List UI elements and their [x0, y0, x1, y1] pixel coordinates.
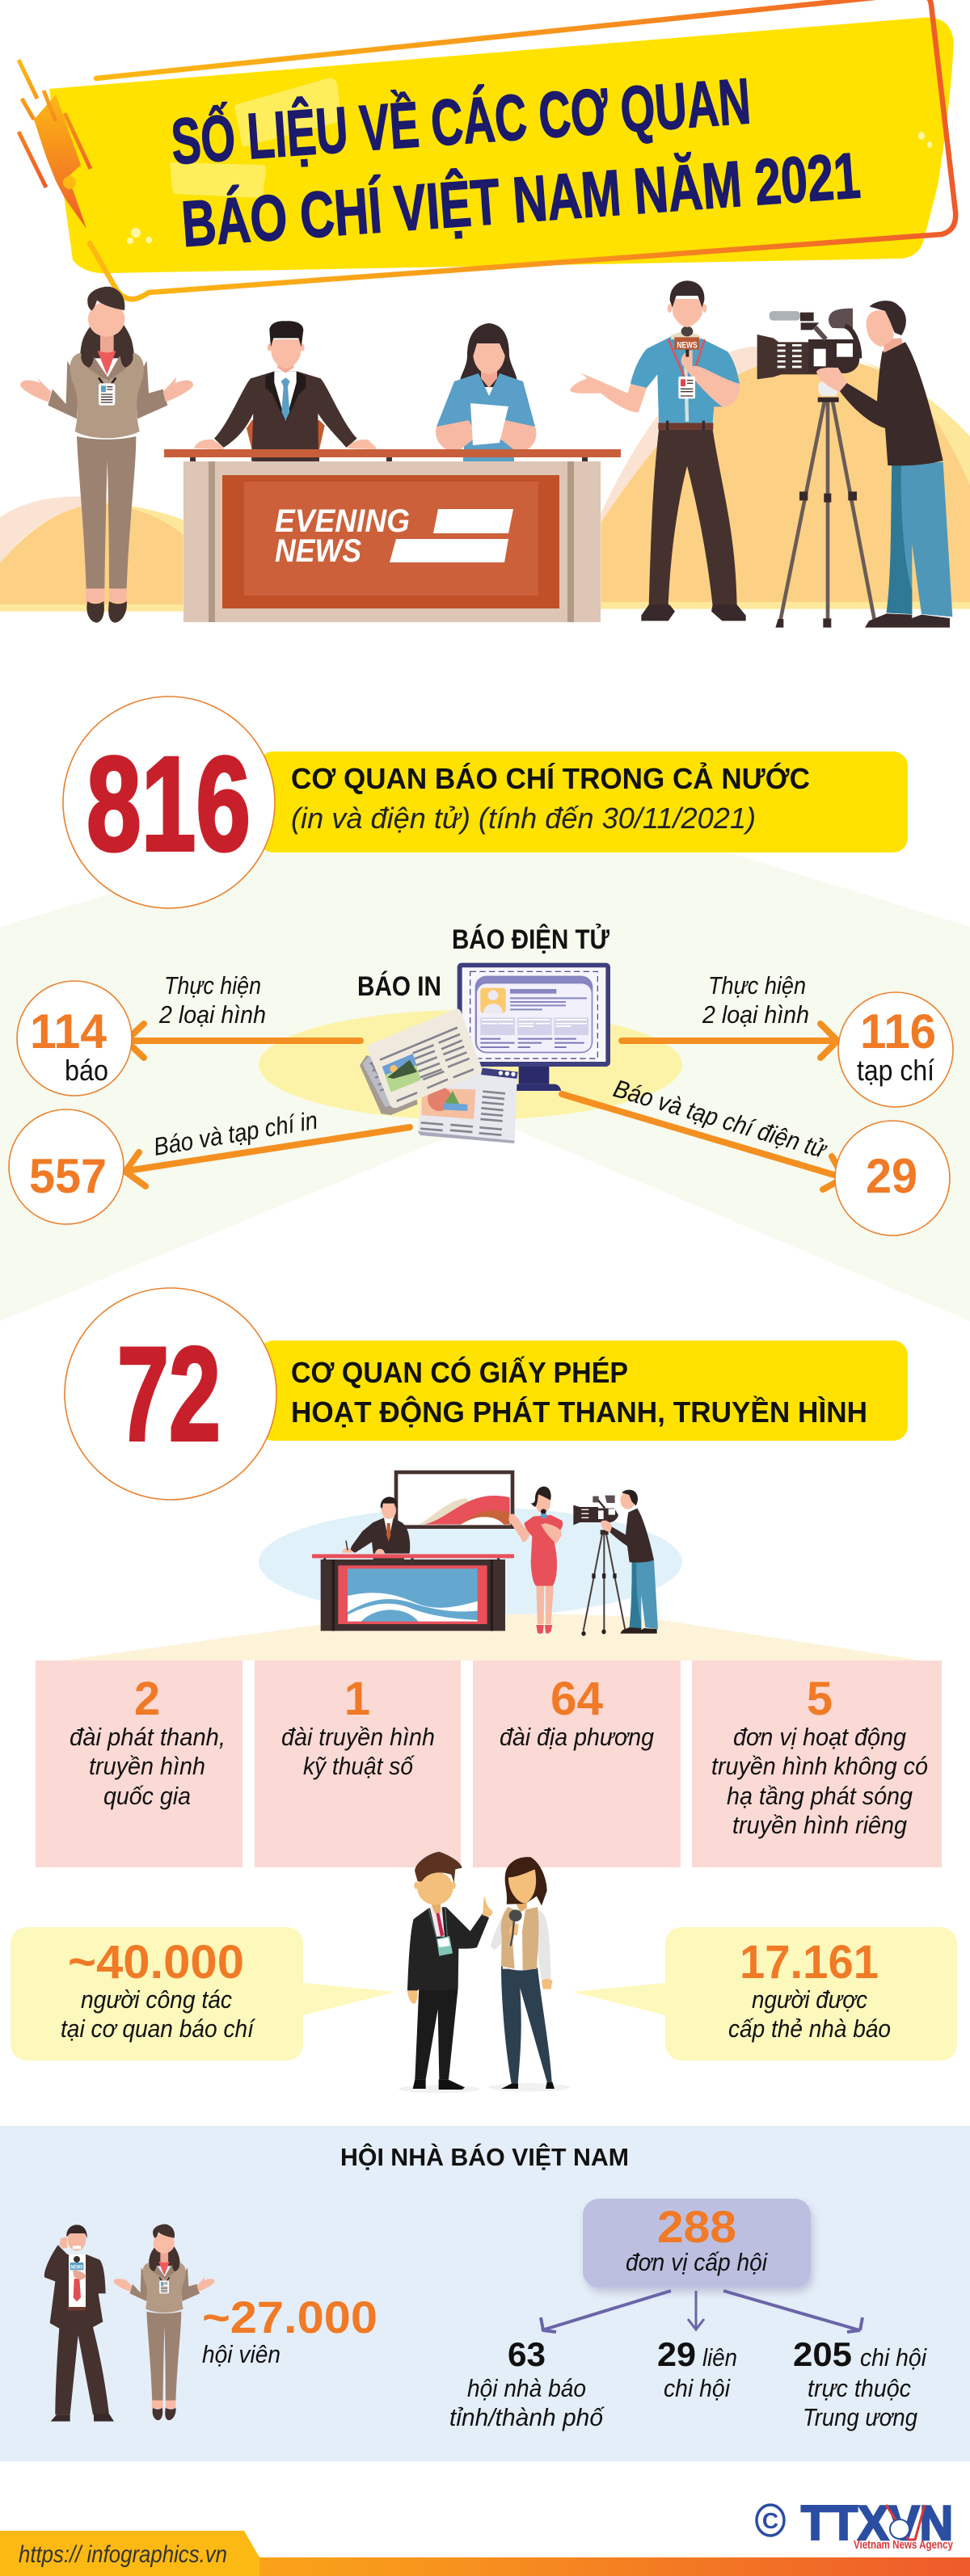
right arrow caption: Thực hiện [708, 971, 806, 1000]
heading line 2: HOẠT ĐỘNG PHÁT THANH, TRUYỀN HÌNH [291, 1395, 867, 1429]
card: 1 [255, 1661, 461, 1867]
item: 29: chi hội [664, 2374, 731, 2402]
circle: 116 tạp chí: tạp chí [857, 1054, 934, 1087]
callout: 40.000: ~40.000 [68, 1936, 244, 1989]
arrow to 114 [126, 1024, 361, 1058]
item: 63: 63 [508, 2335, 546, 2373]
banner highlights [170, 78, 341, 198]
item: 29: 29 [657, 2335, 696, 2373]
card: 64: đài địa phương [500, 1723, 654, 1751]
circle: 29 [835, 1121, 950, 1235]
circle: 116 tạp chí [838, 992, 953, 1107]
number 27.000: ~27.000 [202, 2292, 377, 2342]
woman reporter [114, 2225, 214, 2420]
footer bar [0, 2557, 970, 2576]
box: 288 units: đơn vị cấp hội [626, 2248, 768, 2276]
panel background [0, 2126, 970, 2461]
box: 288 units: 288 [657, 2201, 736, 2252]
mic flag label: NEWS [677, 341, 698, 351]
url tab [0, 2531, 259, 2576]
broadcast illustration [62, 1472, 922, 1661]
small camera and tripod [573, 1496, 625, 1636]
yellow heading bar [259, 1341, 908, 1441]
card: 2: 2 [134, 1673, 160, 1725]
source url: https:// infographics.vn [19, 2541, 227, 2568]
heading line 1: CƠ QUAN CÓ GIẤY PHÉP [291, 1355, 628, 1389]
icon: pen nib [19, 60, 91, 229]
heading subtext: (in và điện tử) (tính đến 30/11/2021) [291, 802, 756, 835]
arrow to 557 [125, 1127, 410, 1186]
news desk [164, 449, 621, 622]
banner dots [127, 132, 932, 244]
label: báo điện tử: BÁO ĐIỆN TỬ [452, 924, 610, 955]
circle: 116 tạp chí: 116 [860, 1004, 936, 1059]
section 816 heading [63, 697, 908, 908]
hero illustration: newsroom [0, 280, 970, 628]
item: 29: liên [702, 2343, 737, 2372]
card: 64: 64 [550, 1673, 603, 1725]
callout: 40.000 [11, 1927, 396, 2060]
copyright mark [757, 2505, 784, 2536]
right arrow caption [702, 971, 809, 1029]
item: 205 [793, 2335, 927, 2431]
cameraman [816, 301, 952, 628]
card: 2: đài phát thanh, [70, 1723, 226, 1751]
desk label: EVENING [275, 503, 410, 539]
callout: 40.000: người công tác [81, 1985, 232, 2014]
item: 63 [449, 2335, 605, 2431]
card: 1: đài truyền hình [281, 1723, 435, 1751]
callout: 17.161: người được [752, 1985, 867, 2014]
circle: 114 báo [17, 981, 132, 1096]
card: 5: đơn vị hoạt động [733, 1723, 906, 1751]
left woman [20, 287, 193, 623]
label: báo in: BÁO IN [357, 971, 441, 1002]
card: 5: truyền hình không có [711, 1752, 928, 1780]
journalists callouts [11, 1852, 957, 2093]
press types diagram [9, 924, 953, 1235]
reporter with microphone [570, 280, 746, 621]
lower-right arrow caption: Báo và tạp chí điện tử [610, 1074, 831, 1164]
number circle [65, 1288, 276, 1500]
card: 5: hạ tầng phát sóng [727, 1782, 913, 1810]
video camera on tripod [757, 309, 875, 628]
man in suit with badge [399, 1852, 492, 2093]
left arrow caption: Thực hiện [164, 971, 261, 1000]
card: 1: 1 [344, 1673, 370, 1725]
arrow to 29 [562, 1094, 844, 1189]
small cameraman [601, 1490, 658, 1634]
arrow to 116 [622, 1024, 837, 1058]
wall screen [396, 1472, 512, 1527]
icon: computer monitor [458, 963, 610, 1091]
item: 205: chi hội [860, 2343, 927, 2372]
man reporter [44, 2225, 114, 2422]
item: 63: hội nhà báo [467, 2374, 586, 2402]
cream floor [62, 1614, 922, 1661]
circle: 114 báo: 114 [30, 1004, 108, 1059]
arrow to 63 [541, 2291, 671, 2332]
footer [0, 2496, 970, 2576]
card: 5 [692, 1661, 942, 1867]
woman in red dress [508, 1487, 563, 1634]
woman in vest with microphone [489, 1857, 570, 2092]
left arrow caption [158, 971, 266, 1029]
right hills [601, 347, 970, 609]
callout: 17.161 [572, 1927, 957, 2060]
seated man [194, 321, 376, 461]
number 816: 816 [86, 730, 251, 879]
circle: 29: 29 [866, 1149, 917, 1203]
circle: 557 [9, 1109, 124, 1224]
mic flag small label: NEWS [71, 2264, 83, 2270]
anchor desk [312, 1554, 514, 1631]
arrow to 205 [723, 2291, 862, 2332]
card: 5: 5 [807, 1673, 833, 1725]
item: 205: trực thuộc [808, 2374, 911, 2402]
seated woman [436, 323, 536, 461]
card: 1: kỹ thuật số [303, 1752, 415, 1780]
arrow to 29 [688, 2291, 704, 2330]
callout: 17.161: cấp thẻ nhà báo [728, 2014, 891, 2043]
desk label second line: NEWS [275, 533, 361, 569]
section 72 heading [65, 1288, 908, 1500]
right arrow caption: 2 loại hình [702, 1000, 809, 1029]
number circle [63, 697, 275, 908]
pale chevron background [0, 780, 970, 1321]
card: 5: truyền hình riêng [732, 1811, 907, 1839]
item: 29 [657, 2335, 737, 2402]
callout: 17.161: 17.161 [740, 1936, 879, 1989]
card: 64 [473, 1661, 681, 1867]
journalists association panel [0, 2126, 970, 2461]
icon: newspapers [360, 1008, 518, 1143]
blue ellipse backdrop [259, 1507, 682, 1617]
TTXVN logo: TTXVN [801, 2496, 953, 2550]
left hills [0, 496, 183, 612]
heading text: CƠ QUAN BÁO CHÍ TRONG CẢ NƯỚC [291, 761, 810, 795]
desk bars [390, 509, 513, 562]
yellow heading bar [259, 751, 908, 852]
card: 2: truyền hình [89, 1752, 205, 1780]
copyright mark: C [762, 2508, 778, 2533]
panel heading: HỘI NHÀ BÁO VIỆT NAM [340, 2142, 629, 2171]
callout: 40.000: tại cơ quan báo chí [61, 2014, 256, 2043]
left arrow caption: 2 loại hình [158, 1000, 266, 1029]
anchor man [342, 1496, 410, 1554]
card: 2: quốc gia [103, 1782, 191, 1810]
circle: 114 báo: báo [65, 1054, 108, 1087]
card: 2 [36, 1661, 242, 1867]
box: 288 units [583, 2199, 813, 2292]
item: 205: Trung ương [803, 2403, 917, 2431]
number 72: 72 [117, 1320, 221, 1468]
lower-left arrow caption: Báo và tạp chí in [151, 1106, 319, 1161]
item: 205: 205 [793, 2335, 852, 2373]
circle: 557: 557 [29, 1149, 107, 1203]
yellow banner shape [49, 18, 954, 273]
members caption: hội viên [202, 2340, 280, 2368]
item: 63: tỉnh/thành phố [449, 2403, 605, 2431]
stat cards [36, 1661, 942, 1867]
title banner [19, 0, 955, 299]
orange frame [90, 0, 955, 299]
center ellipse [259, 1010, 682, 1120]
